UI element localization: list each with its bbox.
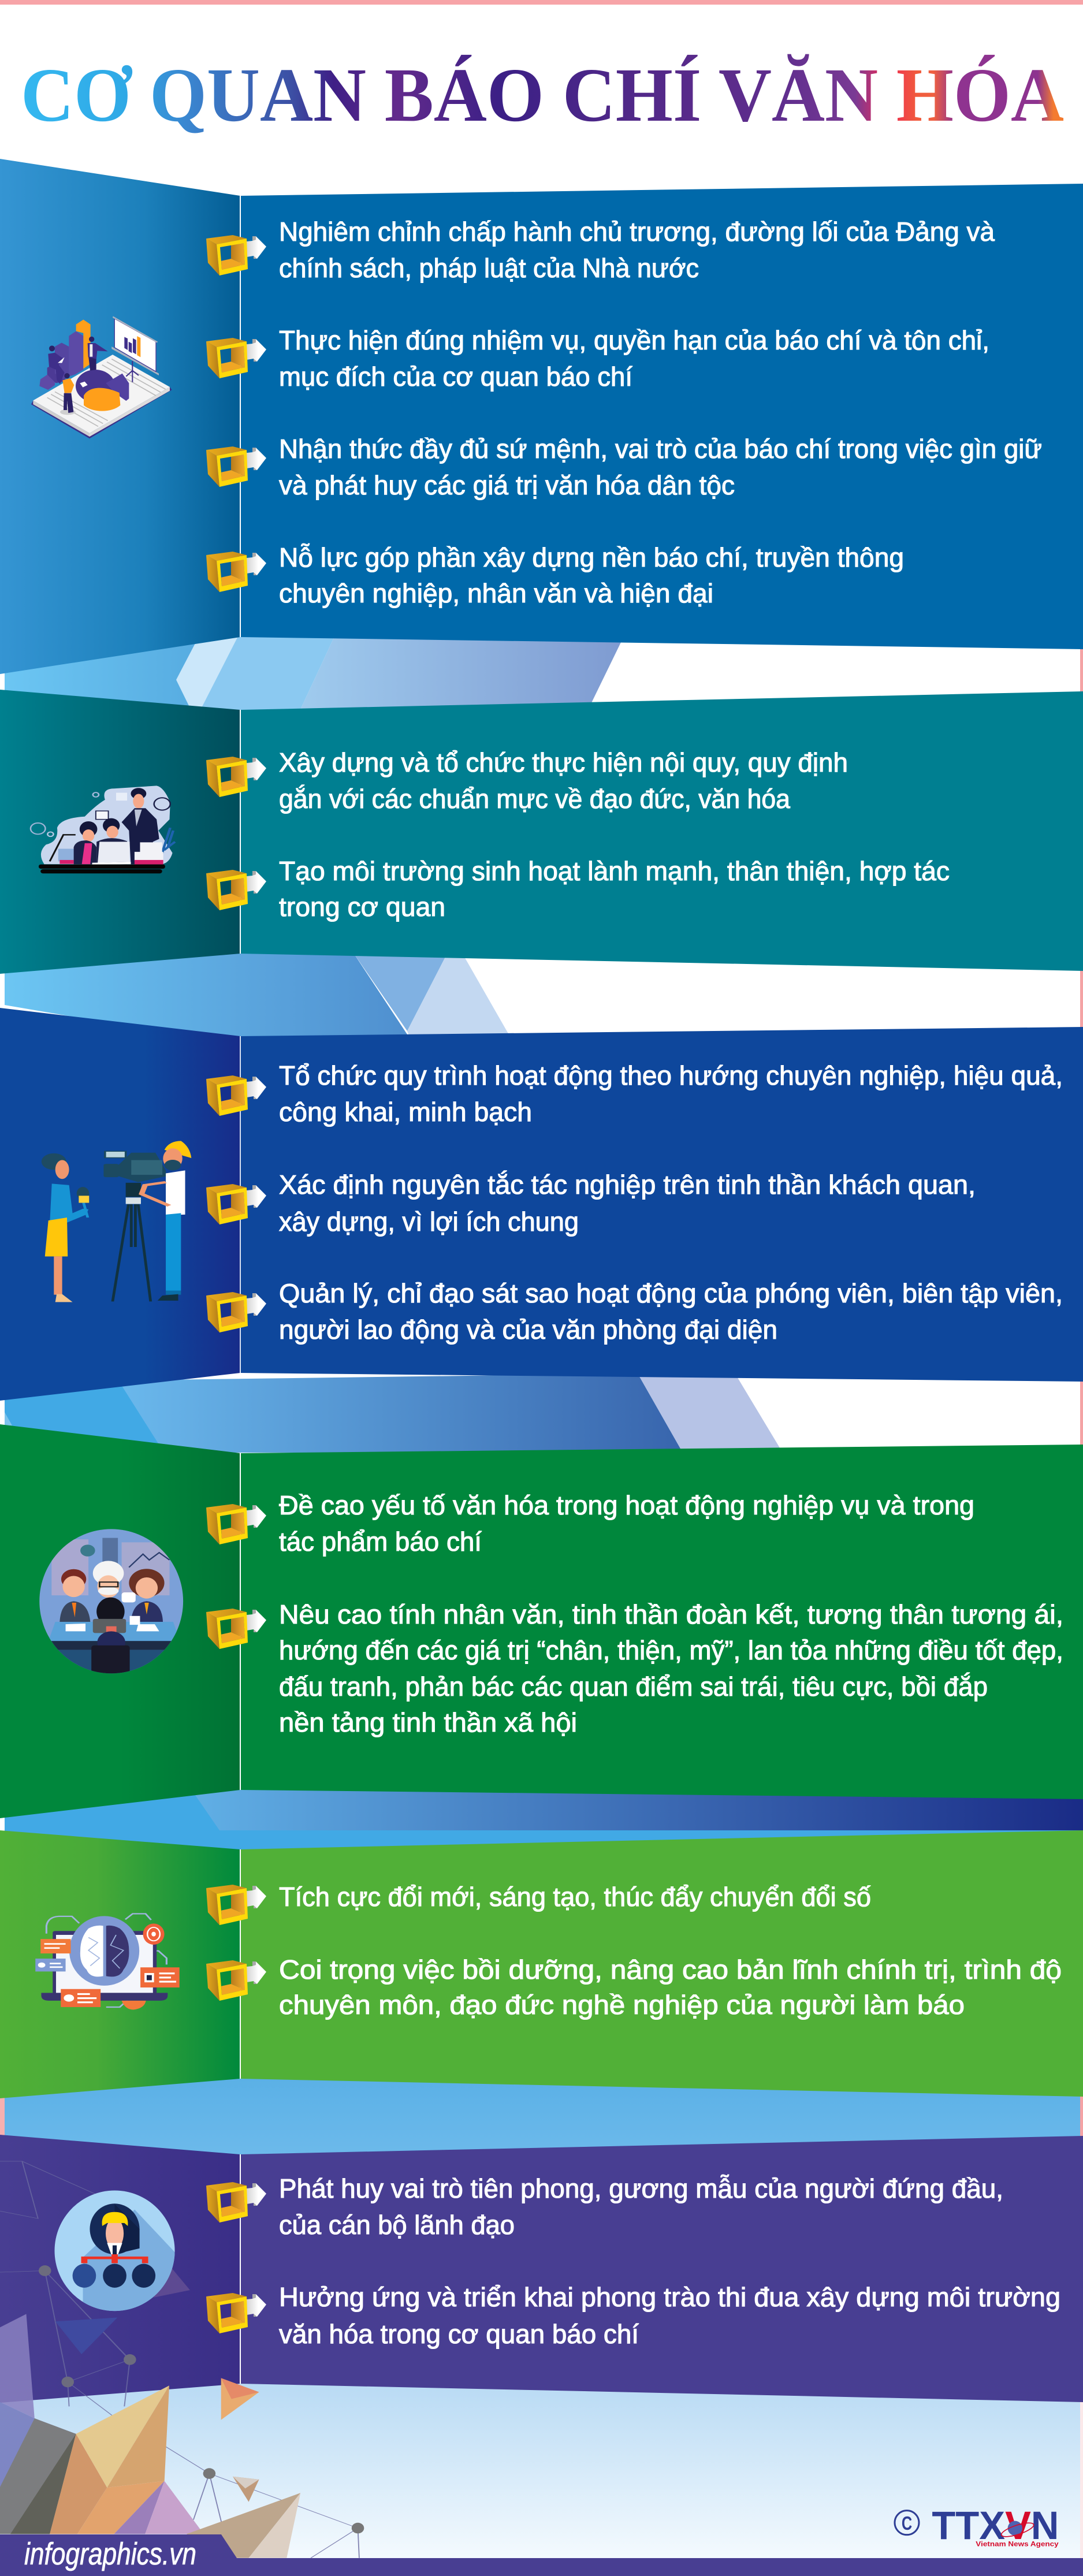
text: văn hóa trong cơ quan báo chí xyxy=(279,2319,639,2349)
text: tác phẩm báo chí xyxy=(279,1527,482,1557)
main face xyxy=(240,184,1083,649)
fold xyxy=(0,1424,240,1818)
right edge strip xyxy=(1080,185,1083,2195)
text: Xác định nguyên tắc tác nghiệp trên tinh thần khách quan, xyxy=(279,1170,976,1200)
main face xyxy=(240,1830,1083,2097)
icon: discussion meeting xyxy=(37,1528,184,1678)
bullet 2 xyxy=(206,1599,1063,1737)
bullet 1 xyxy=(206,1490,974,1557)
ribbon band 5 xyxy=(5,2076,1080,2157)
fold xyxy=(0,1008,240,1401)
text xyxy=(279,325,989,392)
text: Tạo môi trường sinh hoạt lành mạnh, thân thiện, hợp tác xyxy=(279,856,950,886)
panel: 2 teal xyxy=(0,690,1083,974)
panel: 4 green xyxy=(0,1424,1083,1818)
text xyxy=(279,1955,1062,2020)
text: gắn với các chuẩn mực về đạo đức, văn hóa xyxy=(279,784,790,814)
text xyxy=(279,856,950,922)
text xyxy=(279,2282,1060,2349)
icon: brain laptop xyxy=(35,1914,180,2009)
bullet 2 xyxy=(206,856,950,922)
text xyxy=(279,217,995,283)
footer site label: infographics.vn xyxy=(24,2537,196,2571)
text: Nêu cao tính nhân văn, tinh thần đoàn kết, tương thân tương ái, xyxy=(279,1599,1063,1629)
text xyxy=(279,1490,974,1557)
text xyxy=(279,1278,1063,1345)
text: Nhận thức đầy đủ sứ mệnh, vai trò của báo chí trong việc gìn giữ xyxy=(279,434,1042,464)
bottom light background xyxy=(0,2380,1080,2560)
text: nền tảng tinh thần xã hội xyxy=(279,1707,577,1737)
text: Nghiêm chỉnh chấp hành chủ trương, đường lối của Đảng và xyxy=(279,217,995,247)
icon: office team xyxy=(31,786,175,873)
bullet 1 xyxy=(206,1882,871,1925)
bullet 2 xyxy=(206,1955,1062,2020)
fold xyxy=(0,690,240,974)
bullet 2 xyxy=(206,1170,976,1237)
logo: TTXVN: TTXVN xyxy=(932,2504,1059,2548)
icon: reporter and cameraman xyxy=(42,1141,191,1302)
icon: leader org chart xyxy=(54,2191,180,2314)
fold xyxy=(0,1830,240,2098)
panel: 3 navy xyxy=(0,1008,1083,1401)
fold xyxy=(0,2135,240,2403)
left edge pink strip xyxy=(0,2094,5,2137)
text: hướng đến các giá trị “chân, thiện, mỹ”, lan tỏa những điều tốt đẹp, xyxy=(279,1635,1063,1665)
text: Xây dựng và tổ chức thực hiện nội quy, quy định xyxy=(279,747,848,777)
text: xây dựng, vì lợi ích chung xyxy=(279,1207,579,1237)
text: đấu tranh, phản bác các quan điểm sai trái, tiêu cực, bồi đắp xyxy=(279,1672,988,1702)
bullet 1 xyxy=(206,747,848,814)
text: chuyên môn, đạo đức nghề nghiệp của người làm báo xyxy=(279,1990,965,2020)
main face xyxy=(240,1445,1083,1799)
text xyxy=(279,2173,1003,2240)
title: CƠ QUAN BÁO CHÍ VĂN HÓA xyxy=(21,52,1064,137)
icon: presentation chart xyxy=(31,316,172,438)
bullet 3 xyxy=(206,434,1042,500)
panel: 6 purple xyxy=(0,2135,1083,2403)
ribbon band 2 xyxy=(5,947,512,1045)
text: chính sách, pháp luật của Nhà nước xyxy=(279,253,699,283)
top pink bar xyxy=(0,0,1083,5)
text: Quản lý, chỉ đạo sát sao hoạt động của phóng viên, biên tập viên, xyxy=(279,1278,1063,1308)
text: Hưởng ứng và triển khai phong trào thi đua xây dựng môi trường xyxy=(279,2282,1060,2312)
text: Tổ chức quy trình hoạt động theo hướng chuyên nghiệp, hiệu quả, xyxy=(279,1060,1063,1090)
text xyxy=(279,542,904,608)
text: Thực hiện đúng nhiệm vụ, quyền hạn của báo chí và tôn chỉ, xyxy=(279,325,989,355)
text xyxy=(279,1599,1063,1737)
text: và phát huy các giá trị văn hóa dân tộc xyxy=(279,470,735,500)
footer bar xyxy=(0,2558,1083,2576)
bullet 1 xyxy=(206,1060,1063,1127)
ribbon band 3 xyxy=(5,1372,781,1455)
logo: TTXVN: C xyxy=(902,2513,912,2534)
text: của cán bộ lãnh đạo xyxy=(279,2210,515,2240)
main face xyxy=(240,1027,1083,1382)
bullet 2 xyxy=(206,2282,1060,2349)
text: công khai, minh bạch xyxy=(279,1097,532,1127)
text xyxy=(279,747,848,814)
text: chuyên nghiệp, nhân văn và hiện đại xyxy=(279,578,713,608)
text xyxy=(279,1170,976,1237)
bullet 1 xyxy=(206,217,995,283)
text xyxy=(279,434,1042,500)
text: mục đích của cơ quan báo chí xyxy=(279,362,632,392)
bullet 1 xyxy=(206,2173,1003,2240)
text: Tích cực đổi mới, sáng tạo, thúc đẩy chuyển đổi số xyxy=(279,1882,871,1912)
panel: 5 light green xyxy=(0,1830,1083,2098)
text: người lao động và của văn phòng đại diện xyxy=(279,1315,777,1345)
logo: TTXVN: Vietnam News Agency xyxy=(976,2540,1059,2548)
text: Đề cao yếu tố văn hóa trong hoạt động nghiệp vụ và trong xyxy=(279,1490,974,1520)
text: Nỗ lực góp phần xây dựng nền báo chí, truyền thông xyxy=(279,542,904,572)
panel: 1 blue xyxy=(0,159,1083,674)
ribbon band 1 xyxy=(5,634,622,716)
text: trong cơ quan xyxy=(279,892,445,922)
ribbon band 4 xyxy=(5,1785,1083,1854)
bullet 3 xyxy=(206,1278,1063,1345)
bullet 4 xyxy=(206,542,904,608)
main face xyxy=(240,691,1083,971)
low-poly decoration xyxy=(0,2161,364,2558)
bullet 2 xyxy=(206,325,989,392)
fold xyxy=(0,159,240,674)
text: Phát huy vai trò tiên phong, gương mẫu của người đứng đầu, xyxy=(279,2173,1003,2203)
main face xyxy=(240,2136,1083,2402)
text: Coi trọng việc bồi dưỡng, nâng cao bản lĩnh chính trị, trình độ xyxy=(279,1955,1062,1985)
text xyxy=(279,1060,1063,1127)
